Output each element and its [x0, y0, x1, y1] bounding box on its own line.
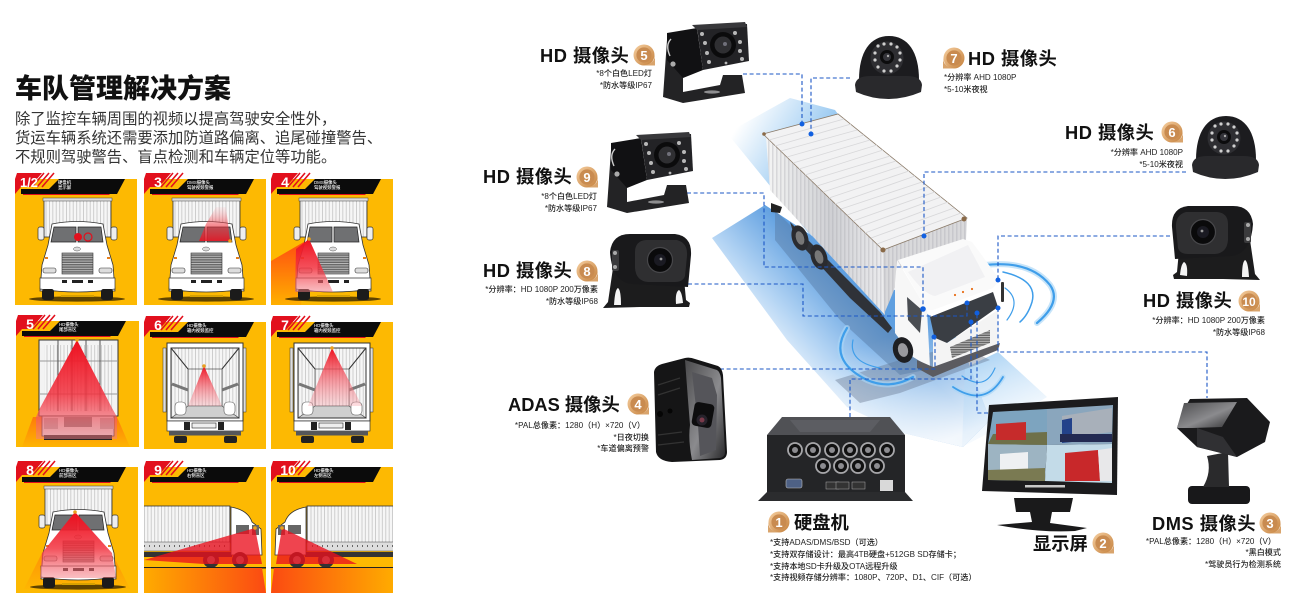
label: camera 5: 5	[640, 48, 648, 63]
intro paragraph: 不规则驾驶警告、盲点检测和车辆定位等功能。	[15, 148, 336, 166]
panel: camera 4: 驾驶视频警报	[314, 184, 341, 191]
label: camera 6	[1065, 122, 1183, 169]
label: camera 7: *5-10米夜视	[944, 84, 988, 94]
ground wedge	[271, 568, 393, 593]
label: hard disk recorder: *支持双存储设计：最高4TB硬盘+512GB SD存储卡；	[770, 549, 961, 559]
red view cone: front	[40, 512, 116, 578]
icon: camera 6	[1192, 116, 1259, 179]
label: camera 9	[483, 166, 598, 213]
label: DMS camera	[1146, 512, 1281, 569]
label: hard disk recorder: 硬盘机	[794, 512, 850, 533]
label: hard disk recorder: 1	[775, 515, 783, 530]
icon: camera 10	[1172, 206, 1260, 280]
panel: cameras 1/2: 硬盘机	[58, 179, 72, 186]
label: camera 7: *分辨率 AHD 1080P	[944, 72, 1016, 82]
panel: cameras 1/2	[15, 173, 137, 305]
panel: camera 4	[271, 173, 393, 305]
red view cone: cargo short	[188, 366, 222, 406]
label: ADAS camera	[508, 394, 649, 453]
label: camera 9: *8个白色LED灯	[541, 191, 597, 201]
panel: camera 5: 5	[26, 316, 34, 332]
cab	[890, 239, 1004, 377]
panel: camera 7: HD摄像头	[314, 322, 334, 329]
ground wedge	[24, 553, 130, 589]
label: camera 10: *分辨率：HD 1080P 200万像素	[1152, 315, 1265, 325]
label: camera 10: 10	[1242, 295, 1256, 309]
dashed connector lines	[687, 74, 1207, 417]
panel: camera 10: 左侧盲区	[314, 472, 332, 479]
label: camera 9: 9	[583, 170, 591, 185]
label: DMS camera: *PAL总像素：1280（H）×720（V）	[1146, 536, 1276, 546]
panel: camera 5: HD摄像头	[59, 321, 79, 328]
red view cone: left	[276, 528, 357, 564]
ground wedge	[144, 568, 266, 593]
icon: camera 8	[603, 234, 691, 308]
label: monitor: 显示屏	[1033, 533, 1088, 554]
panel: camera 10: HD摄像头	[314, 467, 334, 474]
panel: camera 7	[271, 316, 393, 449]
label: camera 6: 6	[1168, 125, 1176, 140]
panel: camera 7: 箱内视频监控	[314, 327, 341, 334]
red view cone: rear	[36, 340, 117, 439]
label: hard disk recorder	[768, 512, 976, 582]
panel: camera 5: 尾部盲区	[59, 326, 77, 333]
label: camera 10	[1143, 290, 1265, 337]
label: hard disk recorder: *支持视频存储分辨率：1080P、720P、D1、CIF（可选）	[770, 572, 976, 582]
panel: camera 8	[16, 461, 138, 593]
icon: camera 7	[855, 36, 922, 99]
ground wedge	[271, 239, 309, 305]
panel: camera 6: HD摄像头	[187, 322, 207, 329]
label: DMS camera: *黑白模式	[1245, 547, 1281, 557]
label: ADAS camera: 4	[634, 397, 642, 412]
panel: camera 8: HD摄像头	[59, 467, 79, 474]
panel: camera 6: 6	[154, 317, 162, 333]
icon: camera 5	[663, 22, 749, 103]
panel: camera 9: 右侧盲区	[187, 472, 205, 479]
label: camera 6: HD 摄像头	[1065, 122, 1154, 143]
label: ADAS camera: *日夜切换	[613, 432, 649, 442]
icon: hard disk recorder	[758, 417, 913, 501]
panel: camera 9: HD摄像头	[187, 467, 207, 474]
label: camera 8: HD 摄像头	[483, 260, 572, 281]
label: camera 8: *防水等级IP68	[546, 296, 598, 306]
label: camera 5: *8个白色LED灯	[596, 68, 652, 78]
panel: camera 10	[271, 461, 395, 593]
ground wedge	[22, 417, 130, 447]
panel: camera 5	[16, 315, 139, 447]
panel: camera 9	[142, 461, 266, 593]
label: DMS camera: *驾驶员行为检测系统	[1205, 559, 1281, 569]
label: camera 8	[483, 260, 598, 306]
panel: camera 7: 7	[281, 317, 289, 333]
label: camera 9: *防水等级IP67	[545, 203, 597, 213]
container side	[766, 137, 885, 315]
label: camera 8: *分辨率：HD 1080P 200万像素	[485, 284, 598, 294]
panel: camera 4: 4	[281, 174, 289, 190]
label: camera 9: HD 摄像头	[483, 166, 572, 187]
red view cone: right	[144, 528, 262, 564]
label: camera 10: HD 摄像头	[1143, 290, 1232, 311]
markers: recorder and display	[74, 233, 92, 241]
panel: camera 3: 3	[154, 174, 162, 190]
label: camera 5: HD 摄像头	[540, 45, 629, 66]
label: camera 6: *5-10米夜视	[1139, 159, 1183, 169]
panel: camera 4: DMS摄像头	[314, 179, 338, 186]
main truck	[762, 114, 1004, 377]
panel: camera 6: 箱内视频监控	[187, 327, 214, 334]
label: camera 6: *分辨率 AHD 1080P	[1111, 147, 1183, 157]
panel: camera 8: 8	[26, 462, 34, 478]
label: hard disk recorder: *支持本地SD卡升级及OTA远程升级	[770, 561, 898, 571]
label: camera 5	[540, 44, 655, 90]
road: blue ground projection	[712, 98, 1047, 447]
label: hard disk recorder: *支持ADAS/DMS/BSD（可选）	[770, 537, 883, 547]
icon: ADAS camera	[654, 358, 727, 462]
panel: camera 3: 驾驶视频警报	[187, 184, 214, 191]
intro paragraph: 除了监控车辆周围的视频以提高驾驶安全性外，	[15, 110, 336, 128]
intro paragraph	[15, 110, 382, 166]
label: camera 8: 8	[583, 264, 591, 279]
sensing waves	[840, 264, 1054, 395]
panel: camera 3	[144, 173, 266, 305]
chassis and rear wheels	[771, 203, 892, 333]
label: monitor	[1033, 532, 1114, 554]
container front	[883, 218, 967, 314]
intro paragraph: 货运车辆系统还需要添加防道路偏离、追尾碰撞警告、	[15, 129, 382, 147]
panel: cameras 1/2: 显示屏	[58, 185, 72, 191]
panel: camera 3: DMS摄像头	[187, 179, 211, 186]
label: ADAS camera: ADAS 摄像头	[508, 394, 620, 415]
label: DMS camera: 3	[1266, 516, 1274, 531]
label: camera 5: *防水等级IP67	[600, 80, 652, 90]
heading: fleet management solution: 车队管理解决方案	[15, 73, 231, 104]
red view cone: cargo long	[308, 348, 362, 406]
label: camera 7	[943, 48, 1057, 94]
red view cone: DMS	[199, 207, 230, 241]
panel: cameras 1/2: 1/2	[20, 175, 38, 190]
label: DMS camera: DMS 摄像头	[1152, 513, 1256, 534]
container roof	[762, 114, 967, 252]
label: monitor: 2	[1099, 536, 1107, 551]
icon: monitor	[982, 397, 1118, 531]
label: ADAS camera: *PAL总像素：1280（H）×720（V）	[515, 420, 645, 430]
label: camera 7: 7	[950, 51, 958, 66]
panel: camera 9: 9	[154, 462, 162, 478]
panel: camera 8: 前部盲区	[59, 472, 77, 479]
panel: camera 10: 10	[280, 462, 296, 478]
icon: camera 9	[607, 132, 693, 213]
panel: camera 6	[144, 316, 266, 449]
label: camera 10: *防水等级IP68	[1213, 327, 1265, 337]
label: camera 7: HD 摄像头	[968, 48, 1057, 69]
red view cone: ADAS	[295, 239, 333, 292]
icon: DMS camera	[1177, 398, 1270, 504]
label: ADAS camera: *车道偏离预警	[597, 443, 649, 453]
